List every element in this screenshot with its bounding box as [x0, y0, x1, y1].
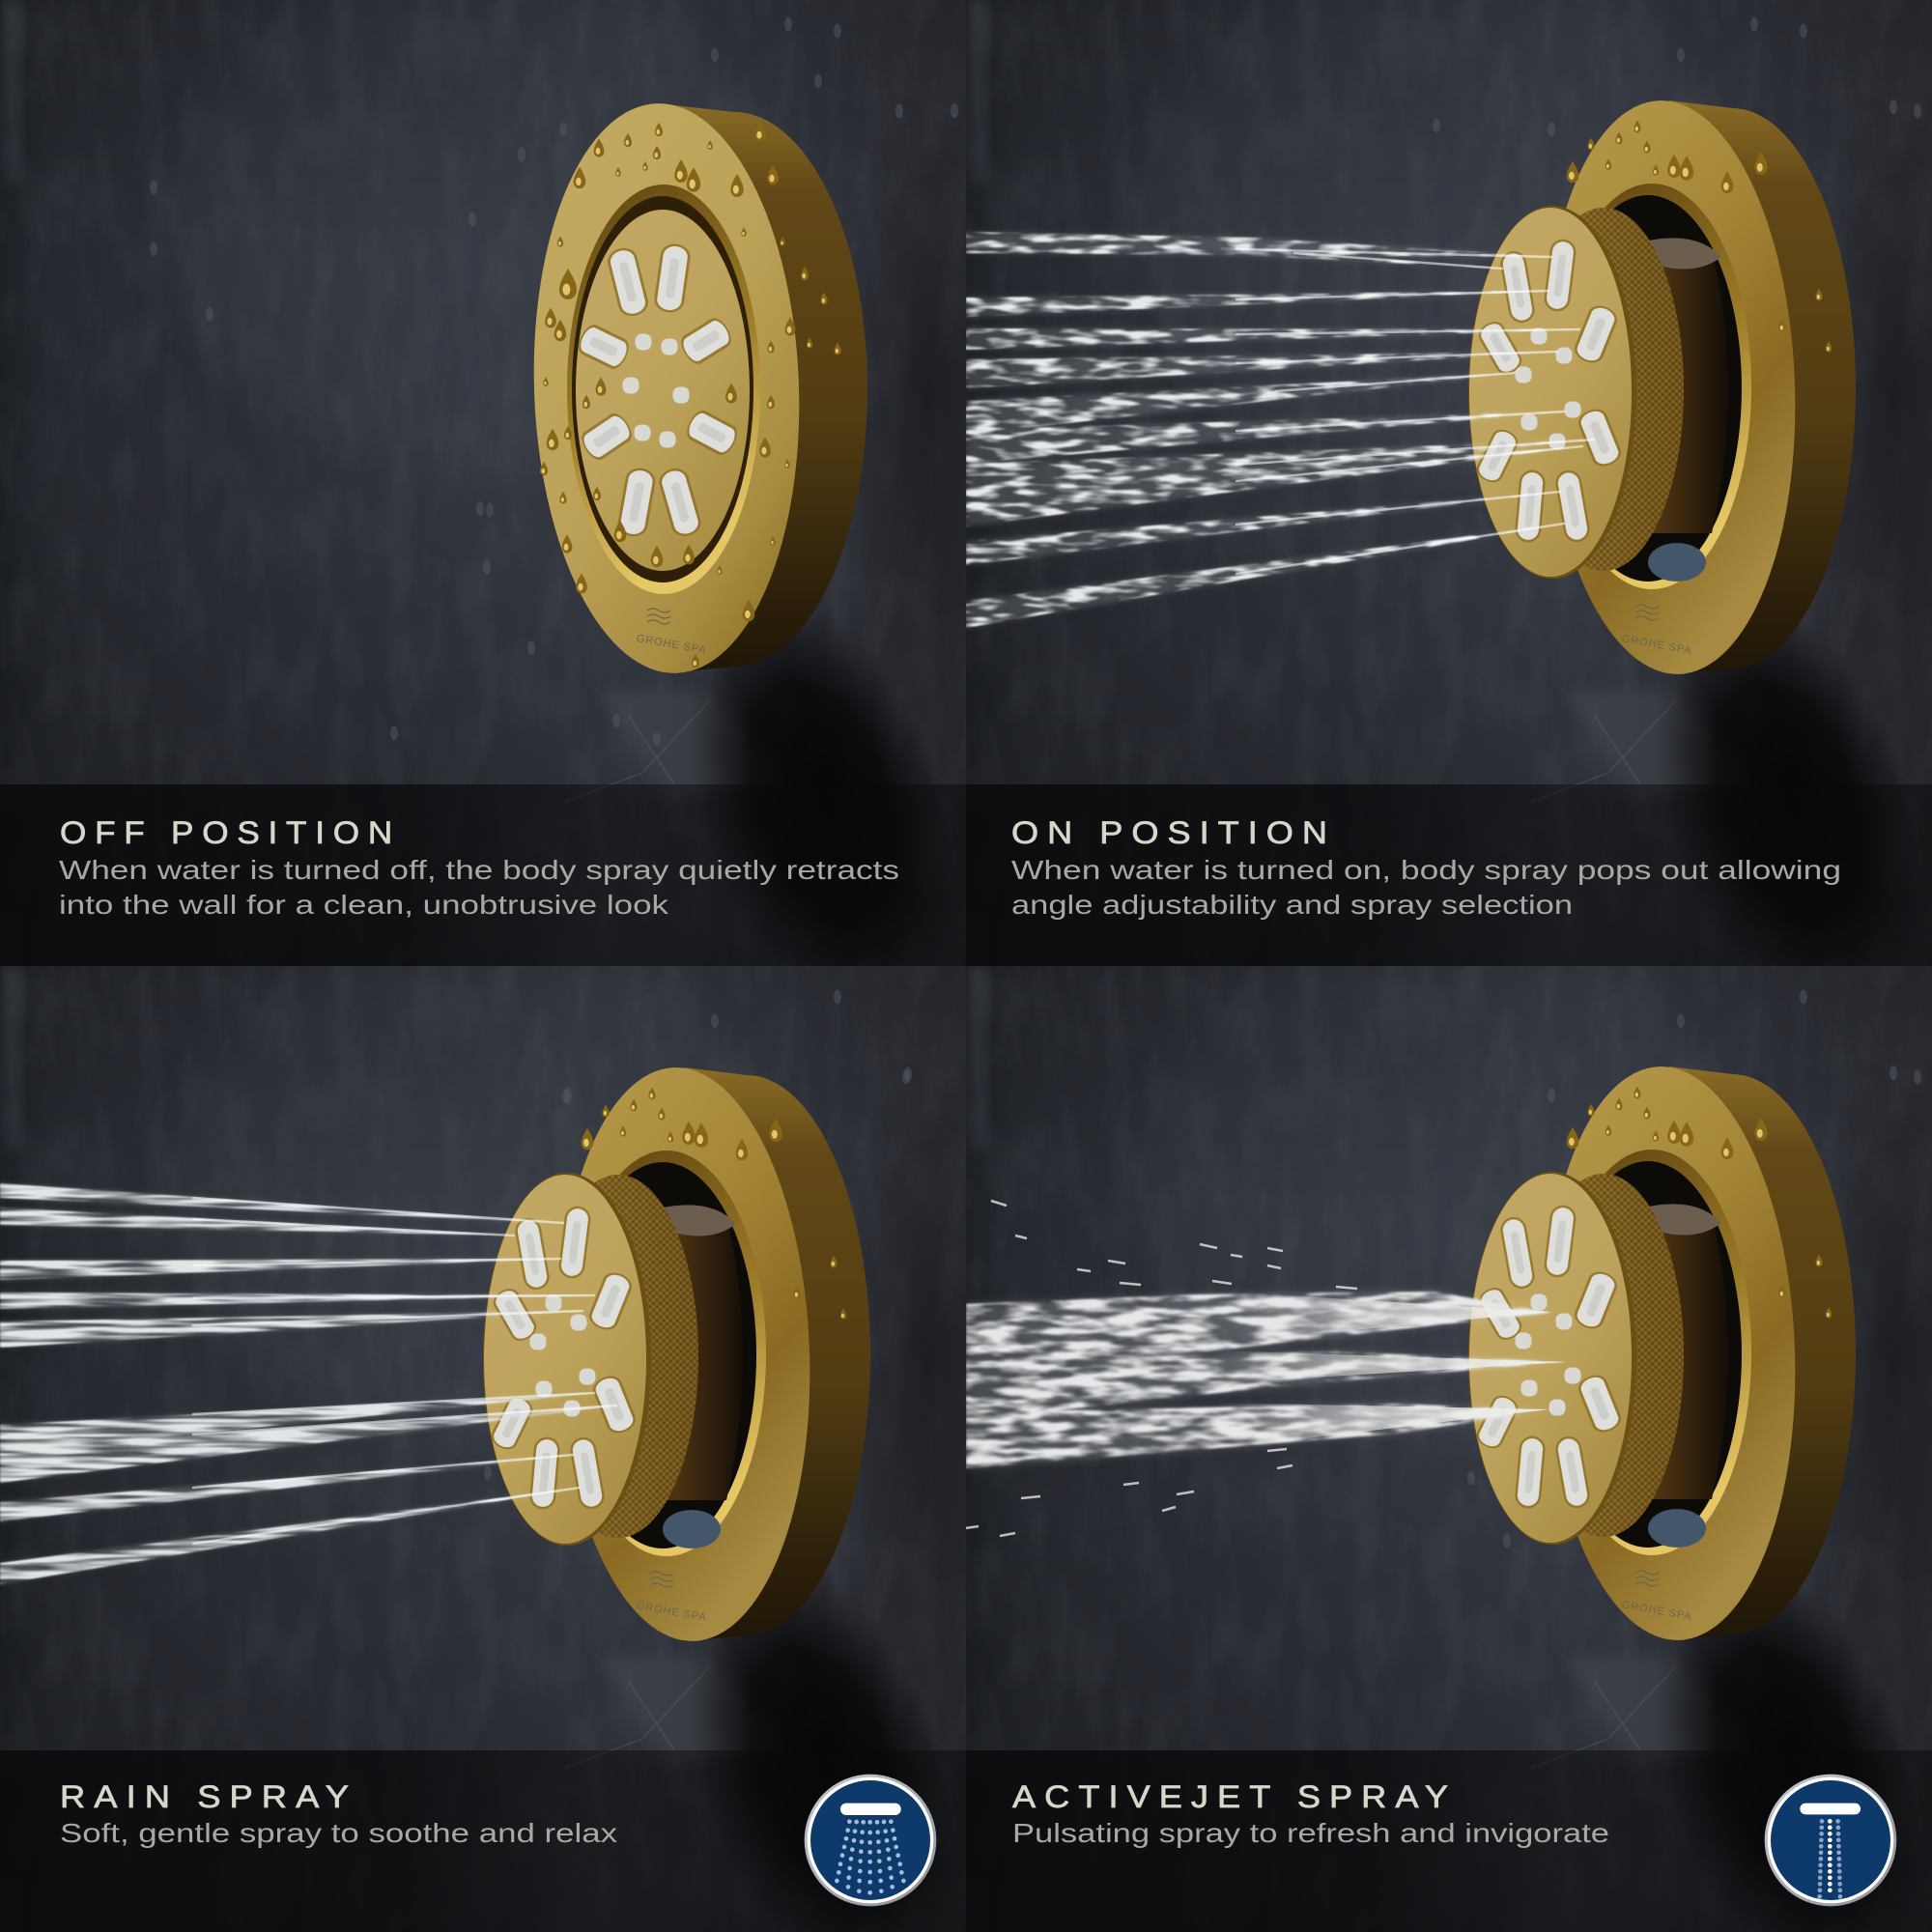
description: on position: angle adjustability and spray selection	[1011, 890, 1573, 920]
wall water droplets	[484, 989, 910, 1480]
description: on position	[1011, 855, 1841, 920]
water jets: rain spray	[0, 1183, 616, 1584]
description: off position	[59, 860, 898, 918]
slate wall background	[0, 0, 966, 966]
slate wall background	[966, 0, 1932, 1046]
icon: rain spray	[805, 1775, 936, 1906]
heading: on position: ON POSITION	[1011, 815, 1336, 850]
caption band	[0, 784, 966, 966]
wall water droplets	[1433, 17, 1921, 133]
device: extended body spray	[483, 1064, 912, 1645]
heading: activejet spray: ACTIVEJET SPRAY	[1012, 1779, 1457, 1814]
panel: off position	[0, 0, 966, 966]
caption band	[966, 784, 1932, 966]
heading: rain spray: RAIN SPRAY	[60, 1779, 357, 1814]
panel: on position	[966, 0, 1932, 1046]
device: retracted body spray: GROHE SPA	[636, 633, 707, 657]
heading: off position: OFF POSITION	[60, 815, 401, 850]
panel: rain spray	[0, 937, 1014, 1932]
caption band	[966, 1750, 1932, 1932]
description: off position: into the wall for a clean, unobtrusive look	[59, 890, 669, 920]
wall water droplets	[1467, 989, 1921, 1548]
device: extended body spray	[1468, 1063, 1897, 1644]
wall water droplets	[150, 17, 958, 746]
description: rain spray: Soft, gentle spray to soothe and relax	[60, 1818, 617, 1848]
slate wall background	[966, 937, 1932, 1932]
device: retracted body spray	[525, 99, 867, 678]
caption band	[0, 1750, 966, 1932]
water jets: rain spray pattern	[966, 232, 1594, 628]
device: extended body spray	[1468, 97, 1897, 678]
description: off position: When water is turned off, the body spray quietly retracts	[59, 855, 899, 885]
water plumes: activejet spray	[965, 1201, 1567, 1536]
description: activejet spray: Pulsating spray to refresh and invigorate	[1012, 1818, 1609, 1848]
description: on position: When water is turned on, body spray pops out allowing	[1011, 855, 1841, 885]
icon: activejet spray	[1765, 1775, 1896, 1906]
panel: activejet spray	[965, 937, 1932, 1932]
slate wall background	[0, 937, 1014, 1932]
